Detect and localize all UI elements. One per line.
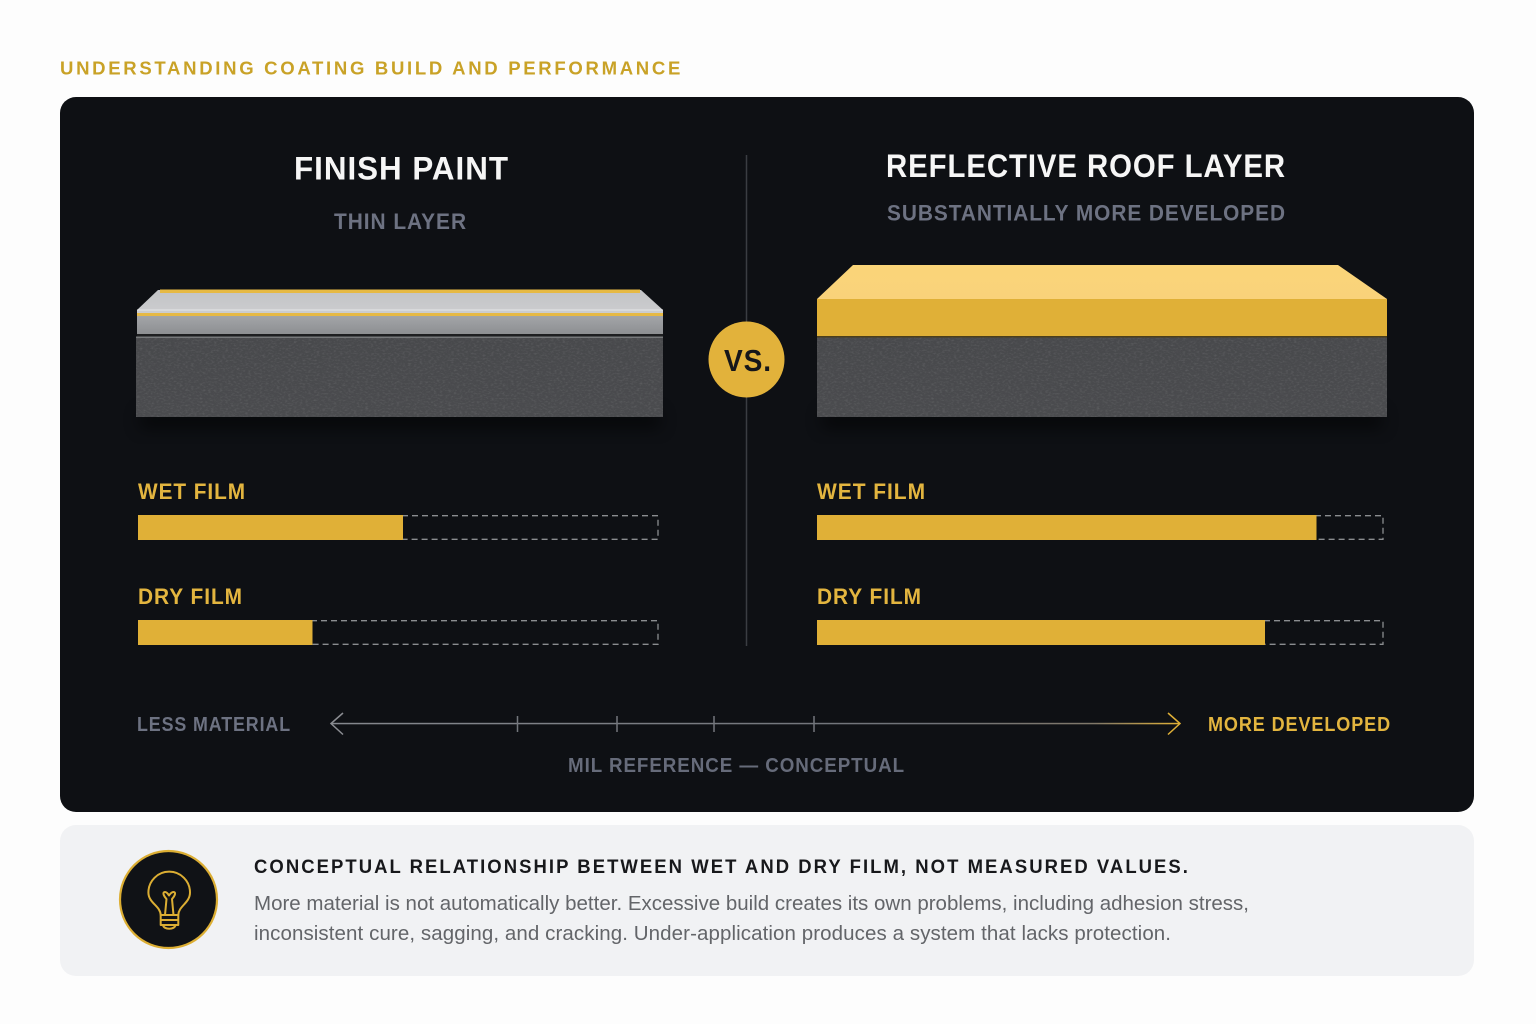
subheading: thin layer: THIN LAYER	[334, 209, 467, 234]
bars: reflective roof dry film: DRY FILM	[817, 584, 922, 609]
bars: finish paint dry film	[138, 584, 658, 645]
bars: reflective roof wet film	[817, 479, 1383, 540]
note body	[254, 892, 1249, 945]
illustration: reflective roof slab	[817, 265, 1387, 428]
eyebrow title: UNDERSTANDING COATING BUILD AND PERFORMANCE	[60, 58, 683, 78]
heading: finish paint: FINISH PAINT	[294, 150, 509, 186]
arrow: mil reference scale	[331, 713, 1180, 734]
heading: reflective roof layer: REFLECTIVE ROOF LAYER	[886, 148, 1286, 184]
illustration: finish paint slab	[136, 290, 663, 428]
icon: light bulb	[120, 851, 217, 948]
panel: dark comparison	[60, 97, 1474, 812]
scale label: more developed: MORE DEVELOPED	[1208, 714, 1391, 736]
scale caption: MIL REFERENCE — CONCEPTUAL	[568, 755, 905, 777]
note body: More material is not automatically better. Excessive build creates its own problems, including adhesion stress,	[254, 892, 1249, 915]
note body: inconsistent cure, sagging, and cracking. Under-application produces a system that lacks protection.	[254, 922, 1171, 945]
scale label: less material: LESS MATERIAL	[137, 714, 291, 736]
badge: VS: VS.	[724, 343, 772, 378]
badge: VS	[708, 322, 784, 398]
bars: finish paint wet film	[138, 479, 658, 540]
bars: reflective roof wet film: WET FILM	[817, 479, 926, 504]
bars: finish paint dry film: DRY FILM	[138, 584, 243, 609]
bars: reflective roof dry film	[817, 584, 1383, 645]
panel: note	[60, 825, 1474, 976]
subheading: substantially more developed: SUBSTANTIALLY MORE DEVELOPED	[887, 200, 1286, 226]
bars: finish paint wet film: WET FILM	[138, 479, 246, 504]
note heading: CONCEPTUAL RELATIONSHIP BETWEEN WET AND DRY FILM, NOT MEASURED VALUES.	[254, 857, 1190, 878]
